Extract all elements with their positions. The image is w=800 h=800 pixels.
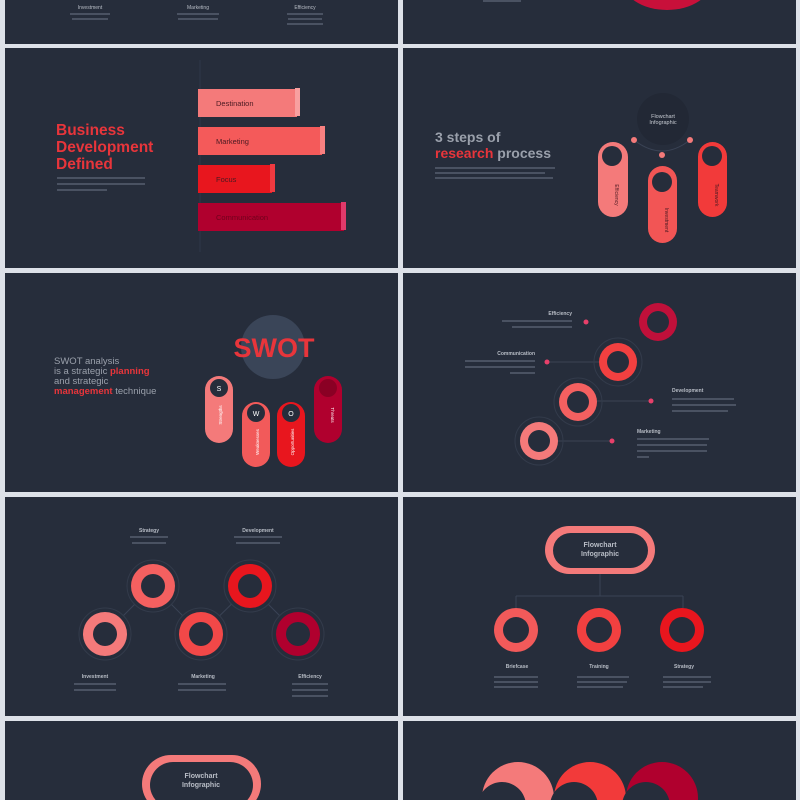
labels: Strategy <box>139 528 159 534</box>
title: Defined <box>56 156 113 173</box>
panel: flowchart tree: Training <box>589 664 609 670</box>
panel: 3 steps <box>403 48 796 268</box>
bars: Marketing <box>216 137 249 146</box>
labels: top-left partial: Investment <box>78 5 103 11</box>
panel: flowchart tree: Strategy <box>674 664 694 670</box>
bars <box>198 88 346 231</box>
heading <box>435 129 551 161</box>
title <box>56 122 153 173</box>
pills <box>205 376 342 467</box>
pills: S <box>217 386 222 393</box>
panel: business development <box>5 48 398 268</box>
paragraph <box>57 177 145 191</box>
panel: zigzag circles <box>5 497 398 716</box>
labels <box>497 311 704 435</box>
labels: top-left partial: Efficiency <box>294 5 316 11</box>
text: and strategic <box>54 376 109 387</box>
panel: SWOT <box>5 273 398 492</box>
pills: O <box>288 411 294 418</box>
bars: Communication <box>216 213 268 222</box>
labels <box>82 528 322 680</box>
pills: W <box>253 411 260 418</box>
pills: Weaknesses <box>255 428 260 455</box>
labels: Marketing <box>637 429 661 435</box>
labels: Development <box>672 388 704 394</box>
panel: bottom-left partial: Flowchart <box>184 773 218 780</box>
circles <box>494 608 704 652</box>
labels: top-left partial <box>70 5 323 25</box>
labels: Efficiency <box>548 311 572 317</box>
pills <box>598 142 727 243</box>
pill: Flowchart <box>583 542 617 549</box>
bars: Focus <box>216 175 237 184</box>
panel: ascending circles <box>403 273 796 492</box>
panel: bottom-left partial <box>5 721 398 800</box>
heading: research process <box>435 145 551 161</box>
center circle: Infographic <box>649 120 677 126</box>
panel: flowchart tree <box>403 497 796 716</box>
pills: Strengths <box>218 405 223 425</box>
title: Development <box>56 139 153 156</box>
text: management technique <box>54 386 156 397</box>
text: SWOT analysis <box>54 356 120 367</box>
labels: Investment <box>82 674 109 680</box>
pill: Infographic <box>581 551 619 558</box>
pills: Teamwork <box>713 184 719 207</box>
text: is a strategic planning <box>54 366 150 377</box>
panel: bottom-right partial <box>403 721 796 800</box>
center circle <box>637 93 689 145</box>
pills: Investment <box>663 208 669 233</box>
panel: bottom-left partial: Infographic <box>182 782 220 789</box>
labels: top-left partial: Marketing <box>187 5 209 11</box>
pills: Threats <box>330 407 335 423</box>
bars: Destination <box>216 99 254 108</box>
heading: 3 steps of <box>435 129 501 145</box>
labels: Development <box>242 528 274 534</box>
title: Business <box>56 122 125 139</box>
pill <box>545 526 655 574</box>
panel: top-right partial <box>403 0 796 44</box>
circles <box>79 560 324 660</box>
labels: Communication <box>497 351 535 357</box>
center circle: Flowchart <box>651 114 675 120</box>
panel: top-left partial <box>5 0 398 44</box>
text <box>54 356 156 397</box>
panel: flowchart tree: Briefcase <box>506 664 528 670</box>
panel: SWOT: SWOT <box>234 333 315 363</box>
labels: Marketing <box>191 674 215 680</box>
labels: Efficiency <box>298 674 322 680</box>
pills: Efficiency <box>613 184 619 206</box>
pills: Opportunities <box>290 428 295 455</box>
red circle bottom <box>622 0 712 10</box>
circles <box>515 303 677 465</box>
